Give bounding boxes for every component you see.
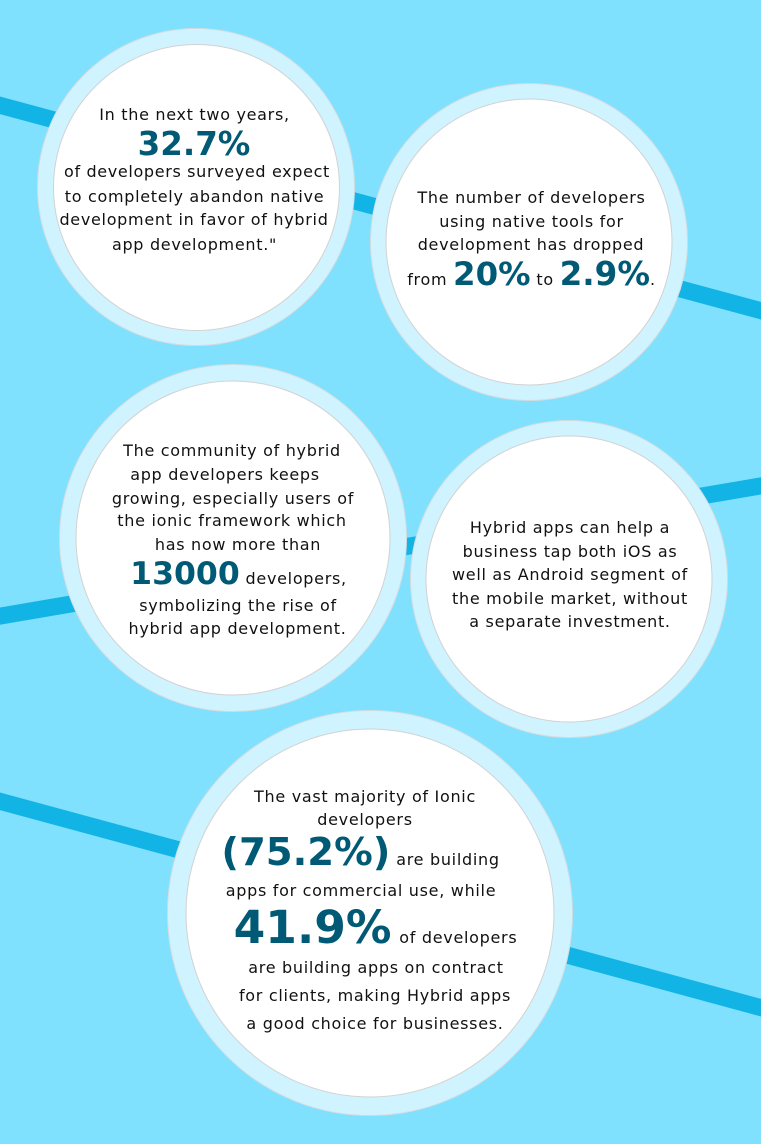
text: the mobile market, without <box>452 589 688 608</box>
text: a separate investment. <box>469 612 671 631</box>
text: (75.2%) are building <box>221 830 500 875</box>
text: app developers keeps <box>130 465 320 484</box>
text block: circle 5 <box>221 787 517 1033</box>
text: apps for commercial use, while <box>226 881 496 900</box>
connector line: middle <box>0 485 761 617</box>
text: are building apps on contract <box>248 958 504 977</box>
text: well as Android segment of <box>452 565 688 584</box>
text block: circle 4 <box>452 518 688 631</box>
text: the ionic framework which <box>117 511 347 530</box>
text: from 20% to 2.9%. <box>407 255 656 293</box>
text: of developers surveyed expect <box>64 162 330 181</box>
text: The vast majority of Ionic <box>254 787 476 806</box>
text: hybrid app development. <box>129 619 346 638</box>
circle 4 <box>410 420 728 738</box>
text: development has dropped <box>418 235 644 254</box>
text: symbolizing the rise of <box>139 596 337 615</box>
text: The community of hybrid <box>123 441 341 460</box>
text: for clients, making Hybrid apps <box>239 986 511 1005</box>
text: In the next two years, <box>99 105 290 124</box>
text: 13000 developers, <box>130 556 347 592</box>
circle 3 <box>60 364 406 712</box>
text: business tap both iOS as <box>463 542 677 561</box>
text: using native tools for <box>439 212 624 231</box>
circle 2 <box>370 84 688 400</box>
text: growing, especially users of <box>112 489 354 508</box>
connector line: top <box>0 104 761 312</box>
text: has now more than <box>155 535 321 554</box>
connector line: bottom <box>0 800 761 1009</box>
text: 41.9% of developers <box>234 901 517 954</box>
circle 1 <box>38 28 354 346</box>
circle 5 <box>168 710 572 1116</box>
text: development in favor of hybrid <box>59 210 329 229</box>
text: app development." <box>112 235 277 254</box>
text: a good choice for businesses. <box>246 1014 504 1033</box>
text: to completely abandon native <box>65 187 324 206</box>
text block: circle 1 <box>59 105 330 254</box>
text: 32.7% <box>138 125 250 163</box>
text: developers <box>317 810 413 829</box>
text: Hybrid apps can help a <box>470 518 670 537</box>
text block: circle 3 <box>112 441 354 638</box>
text: The number of developers <box>417 188 646 207</box>
text block: circle 2 <box>407 188 656 293</box>
